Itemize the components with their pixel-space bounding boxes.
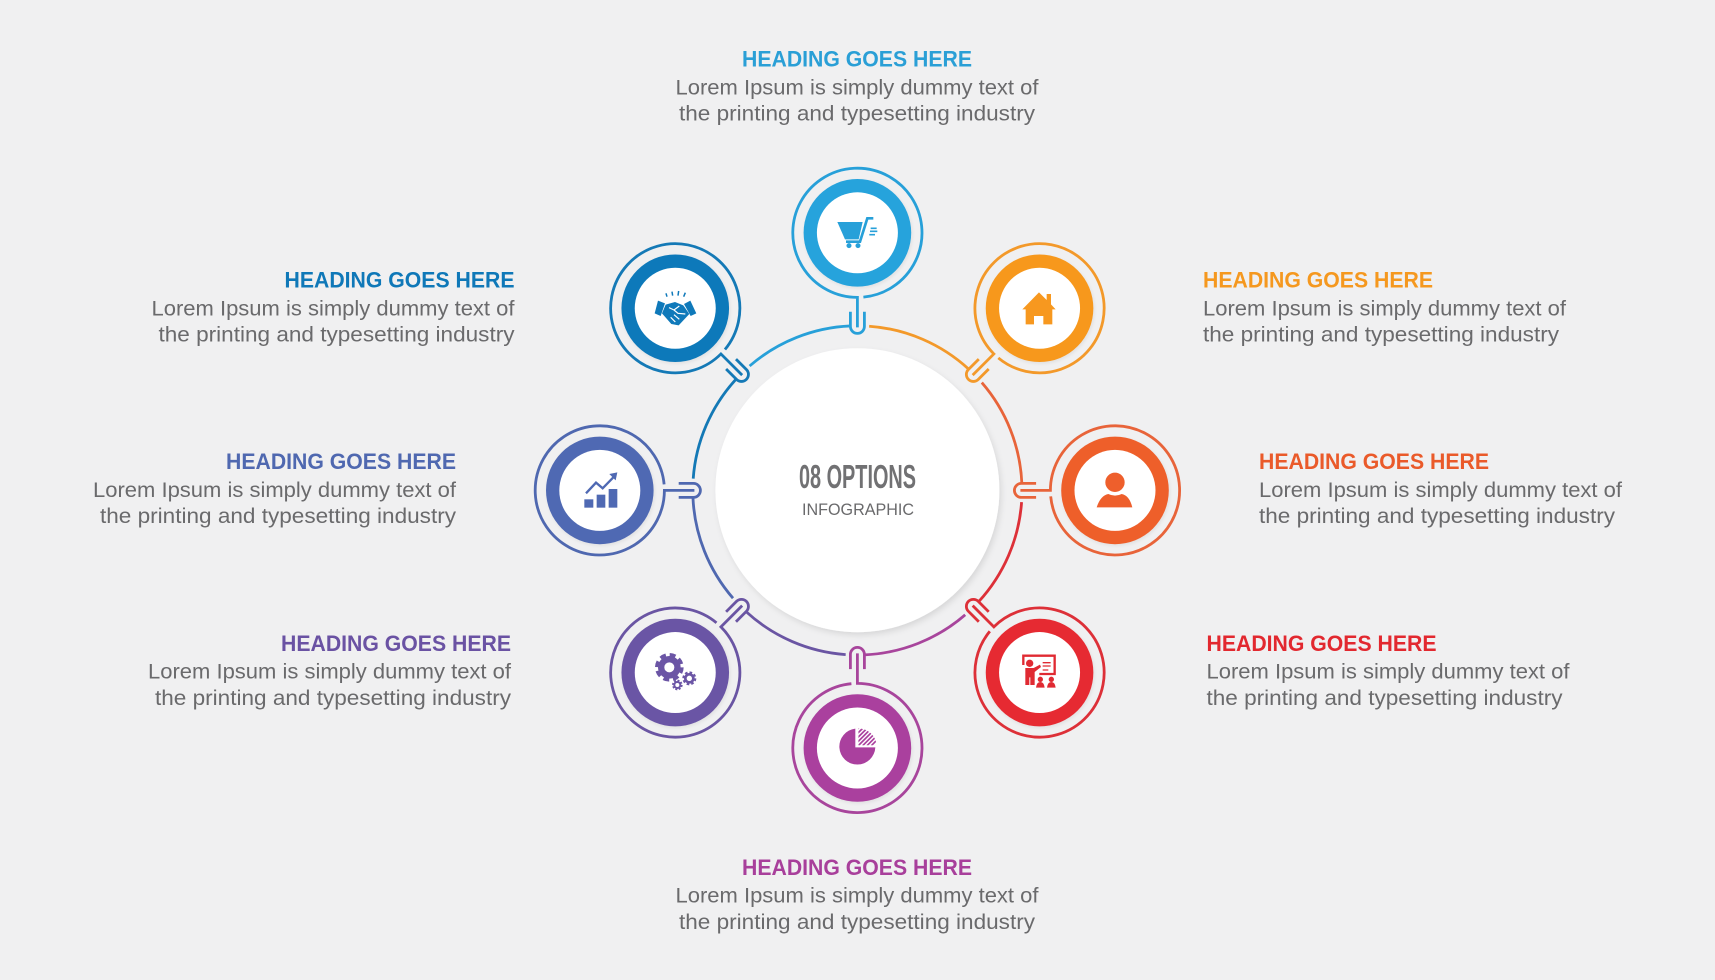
text: top right option — [1203, 268, 1566, 347]
text: bottom left option: HEADING GOES HERE — [281, 631, 511, 656]
central title: 08 OPTIONS — [799, 458, 916, 495]
connector, arc and outer ring — [535, 426, 733, 598]
option 5: bottom, pie chart — [676, 615, 1039, 934]
text: top left option: the printing and typesetting industry — [158, 324, 515, 347]
text: bottom option — [676, 855, 1039, 934]
text: bottom left option: Lorem Ipsum is simply dummy text of — [148, 660, 511, 683]
text: left option — [93, 449, 457, 528]
icon: pie chart — [839, 728, 876, 764]
text: top option: Lorem Ipsum is simply dummy text of — [676, 76, 1039, 99]
text: top left option: Lorem Ipsum is simply dummy text of — [152, 297, 515, 320]
coloured ring — [804, 179, 911, 287]
connector, arc and outer ring — [793, 615, 965, 813]
connector, arc and outer ring — [869, 186, 1131, 448]
text: top option: HEADING GOES HERE — [742, 47, 972, 72]
option 4: bottom right, presentation — [900, 502, 1570, 764]
text: bottom left option: the printing and typesetting industry — [155, 687, 512, 710]
connector, arc and outer ring — [982, 383, 1180, 555]
icon: gears — [657, 655, 695, 689]
coloured ring — [986, 254, 1093, 362]
text: right option: the printing and typesetting industry — [1259, 505, 1616, 528]
text: right option: Lorem Ipsum is simply dummy text of — [1259, 479, 1622, 502]
text: top option: the printing and typesetting industry — [679, 103, 1036, 126]
text: top left option: HEADING GOES HERE — [284, 268, 514, 293]
central subtitle: INFOGRAPHIC — [802, 501, 914, 519]
connector, arc and outer ring — [900, 502, 1161, 764]
connector, arc and outer ring — [553, 217, 815, 479]
coloured ring — [1061, 437, 1169, 544]
option 3: right, person — [982, 383, 1622, 555]
text: left option: Lorem Ipsum is simply dummy text of — [93, 479, 456, 502]
text: right option — [1259, 449, 1622, 528]
text: top left option — [152, 268, 515, 347]
icon: growth chart — [584, 472, 617, 508]
icon: person — [1097, 473, 1132, 507]
text: bottom right option — [1206, 631, 1570, 710]
coloured ring — [804, 694, 911, 802]
text: top right option: the printing and typesetting industry — [1203, 324, 1560, 347]
connector, arc and outer ring — [750, 168, 922, 366]
text: top option — [676, 47, 1039, 126]
icon: house — [1022, 292, 1056, 324]
icon: shopping cart — [837, 218, 877, 248]
coloured ring — [546, 437, 654, 544]
text: left option: the printing and typesetting industry — [100, 505, 457, 528]
text: bottom left option — [148, 631, 512, 710]
text: bottom option: Lorem Ipsum is simply dummy text of — [676, 885, 1039, 908]
text: bottom right option: HEADING GOES HERE — [1206, 631, 1436, 656]
coloured ring — [621, 254, 729, 362]
text: bottom right option: Lorem Ipsum is simply dummy text of — [1206, 660, 1570, 683]
option 2: top right, house — [869, 186, 1566, 448]
icon: presentation — [1023, 656, 1056, 688]
connector, arc and outer ring — [584, 533, 846, 794]
icon: handshake — [655, 291, 696, 325]
text: bottom option: HEADING GOES HERE — [742, 855, 972, 880]
coloured ring — [621, 619, 729, 726]
text: right option: HEADING GOES HERE — [1259, 449, 1489, 474]
text: top right option: HEADING GOES HERE — [1203, 268, 1433, 293]
central circle — [715, 348, 999, 632]
coloured ring — [986, 619, 1093, 726]
text: left option: HEADING GOES HERE — [226, 449, 456, 474]
option 1: top, cart — [676, 47, 1039, 366]
text: bottom right option: the printing and typesetting industry — [1206, 687, 1563, 710]
option 7: left, growth chart — [93, 426, 733, 598]
option 6: bottom left, gears — [148, 533, 846, 794]
option 8: top left, handshake — [152, 217, 815, 479]
text: top right option: Lorem Ipsum is simply dummy text of — [1203, 297, 1566, 320]
text: bottom option: the printing and typesetting industry — [679, 911, 1036, 934]
